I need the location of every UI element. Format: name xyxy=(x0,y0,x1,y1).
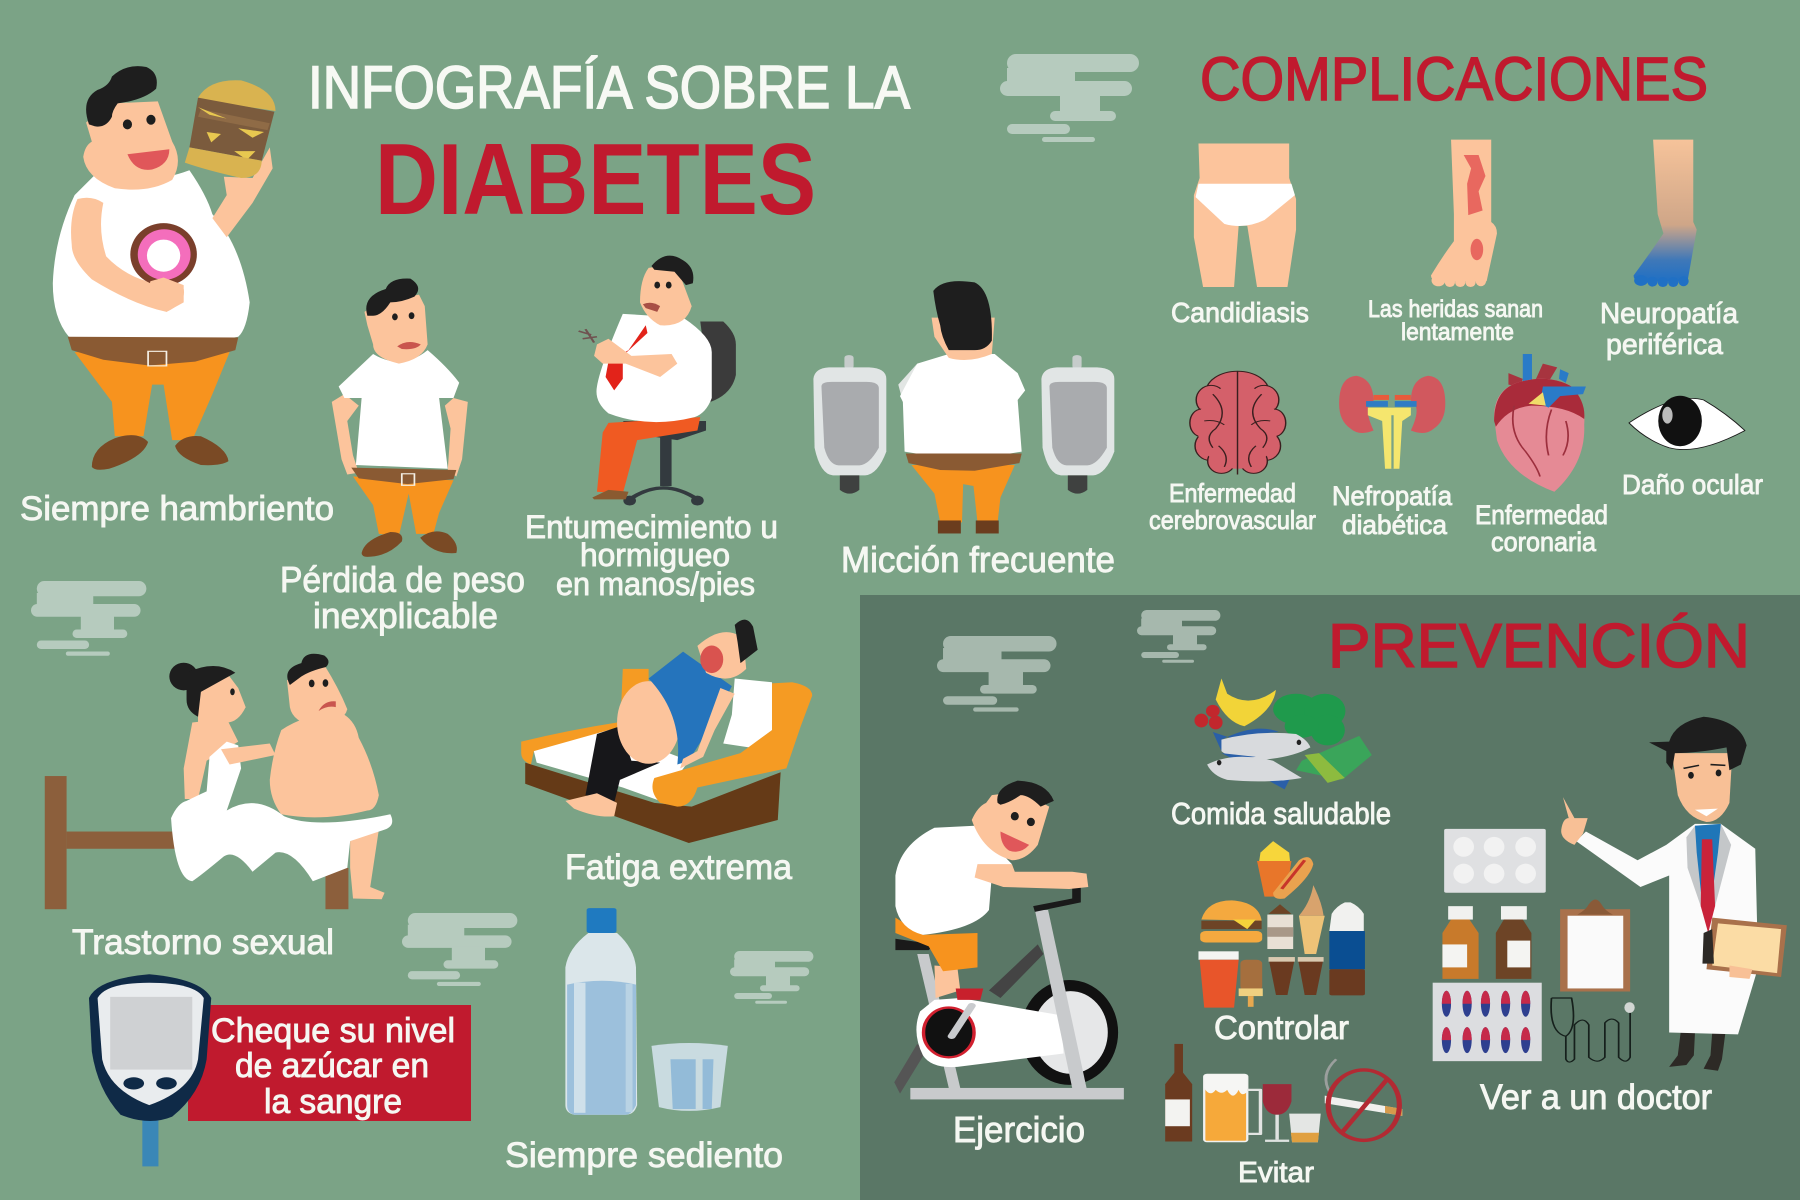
icon: man on exercise bike xyxy=(894,781,1124,1099)
label: Nefropatía xyxy=(1332,481,1453,511)
label: Trastorno sexual xyxy=(72,923,334,962)
label: Ver a un doctor xyxy=(1480,1078,1712,1117)
label: coronaria xyxy=(1491,527,1597,557)
label: diabética xyxy=(1342,510,1448,540)
icon: alcohol and tobacco xyxy=(1165,1044,1402,1142)
label: Entumecimiento u xyxy=(525,509,778,545)
icon: right urinal xyxy=(1041,355,1114,494)
decorative cloud left xyxy=(31,581,146,656)
icon: kidneys xyxy=(1339,376,1445,469)
title line: INFOGRAFÍA SOBRE LA xyxy=(308,54,910,121)
icon: glucose meter xyxy=(89,974,211,1166)
decorative cloud prevention top xyxy=(1137,610,1220,663)
label: Comida saludable xyxy=(1171,796,1391,831)
label: Fatiga extrema xyxy=(565,848,793,887)
icon: wounded foot xyxy=(1431,140,1497,287)
heading: complicaciones: COMPLICACIONES xyxy=(1200,45,1708,113)
decorative cloud right xyxy=(730,951,813,1004)
decorative cloud top xyxy=(1000,54,1139,142)
label: Daño ocular xyxy=(1622,469,1763,500)
label: Ejercicio xyxy=(953,1109,1085,1150)
icon: junk food xyxy=(1198,841,1365,1008)
icon: water bottle and glass xyxy=(565,908,728,1115)
icon: brain xyxy=(1190,371,1286,475)
label: hormigueo xyxy=(580,537,730,573)
icon: eye xyxy=(1629,396,1745,450)
icon: medicines xyxy=(1433,829,1546,1061)
heading: prevencion: PREVENCIÓN xyxy=(1328,612,1750,681)
icon: man sleeping on sofa xyxy=(521,620,812,843)
panel: prevention background xyxy=(860,595,1800,1200)
label xyxy=(1600,298,1739,361)
icon: doctor xyxy=(1561,717,1787,1071)
icon: clipboard and stethoscope xyxy=(1551,899,1635,1062)
label: Siempre hambriento xyxy=(20,490,334,528)
icon: man in office chair with numb hands xyxy=(579,256,736,506)
decorative cloud prevention left xyxy=(937,636,1057,712)
icon: couple on bed xyxy=(45,654,392,909)
icon: thin man holding loose pants xyxy=(332,279,468,557)
label: Evitar xyxy=(1238,1157,1314,1189)
label: Pérdida de peso xyxy=(280,559,525,600)
label xyxy=(1332,481,1453,540)
label: periférica xyxy=(1606,329,1724,361)
label: inexplicable xyxy=(313,595,498,636)
label: Enfermedad xyxy=(1169,478,1296,508)
label: Controlar xyxy=(1214,1009,1349,1046)
title: diabetes: DIABETES xyxy=(375,124,816,236)
label: Neuropatía xyxy=(1600,298,1739,330)
label: Enfermedad xyxy=(1475,500,1608,530)
icon: left urinal xyxy=(813,355,886,494)
callout: check blood sugar: de azúcar en xyxy=(235,1047,429,1085)
icon: heart xyxy=(1494,354,1586,492)
icon: man from behind between urinals xyxy=(898,281,1025,533)
decorative cloud middle xyxy=(402,913,517,986)
label: Siempre sediento xyxy=(505,1136,783,1175)
icon: torso with underwear xyxy=(1194,144,1296,287)
callout: check blood sugar xyxy=(188,1005,471,1121)
label: Candidiasis xyxy=(1171,297,1309,328)
label xyxy=(1368,296,1543,346)
label: Micción frecuente xyxy=(841,539,1115,580)
callout: check blood sugar: Cheque su nivel xyxy=(211,1012,455,1050)
label: cerebrovascular xyxy=(1149,505,1316,535)
icon: hungry man with burger and donut xyxy=(53,66,276,470)
icon: healthy food xyxy=(1194,678,1372,789)
label: Las heridas sanan xyxy=(1368,296,1543,323)
label xyxy=(1149,478,1316,535)
label xyxy=(1475,500,1608,557)
label xyxy=(525,509,778,602)
icon: neuropathy foot xyxy=(1634,140,1697,287)
label xyxy=(280,559,525,636)
callout: check blood sugar: la sangre xyxy=(264,1083,402,1121)
label: lentamente xyxy=(1401,319,1514,346)
label: en manos/pies xyxy=(556,566,755,602)
